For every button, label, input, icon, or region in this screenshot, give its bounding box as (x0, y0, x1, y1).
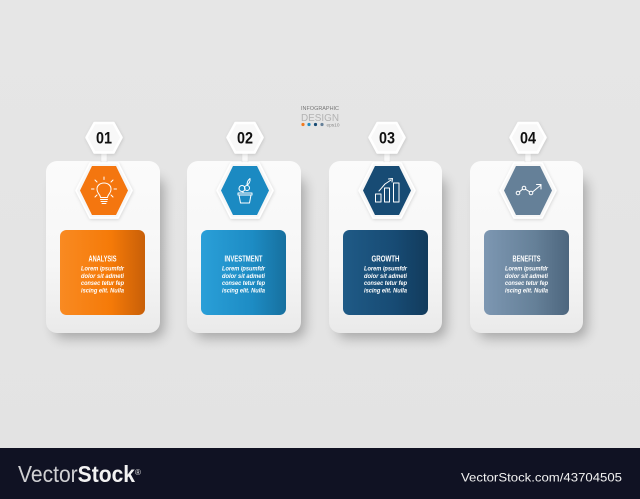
content box 4: dolor sit admeti (505, 273, 548, 280)
icon hexagon: potted plant (217, 163, 273, 218)
content box 1 (60, 230, 145, 315)
header logo: eps10 (326, 122, 340, 128)
card 3 shadow and base (329, 161, 446, 338)
content box 1: ANALYSIS (88, 254, 117, 264)
footer bar (0, 448, 640, 499)
panel: step 2 investment (187, 123, 305, 338)
content box 2: Lorem ipsumfdr (222, 266, 265, 272)
content box 1: iscing elit. Nulla (81, 287, 124, 294)
content box 4 (484, 230, 569, 315)
panel: step 1 analysis (46, 123, 164, 338)
content box 2: consec tetur fep (222, 280, 265, 287)
icon hexagon: growth bars (359, 163, 415, 218)
content box 2: INVESTMENT (224, 254, 262, 264)
panel: step 3 growth (329, 123, 446, 338)
card 2 shadow and base (187, 161, 305, 338)
content box 3: consec tetur fep (364, 280, 407, 287)
footer logo: VectorStock (18, 461, 135, 487)
number badge 01 (86, 123, 122, 166)
footer url: VectorStock.com/43704505 (461, 470, 622, 484)
content box 2 (201, 230, 286, 315)
number badge 04: 04 (520, 128, 536, 147)
number badge 03 (370, 123, 404, 166)
content box 3 (343, 230, 428, 315)
content box 4: BENEFITS (512, 254, 541, 264)
content box 1: consec tetur fep (81, 280, 124, 287)
content box 3: iscing elit. Nulla (364, 287, 407, 294)
content box 4: consec tetur fep (505, 280, 548, 287)
content box 3: Lorem ipsumfdr (364, 266, 407, 272)
registered mark: ® (135, 468, 141, 477)
icon hexagon: light bulb (76, 163, 132, 218)
content box 1: dolor sit admeti (81, 273, 124, 280)
number badge 02 (228, 123, 262, 166)
content box 4: iscing elit. Nulla (505, 287, 548, 294)
content box 2: iscing elit. Nulla (222, 287, 265, 294)
header logo: DESIGN (301, 112, 339, 124)
content box 2: dolor sit admeti (222, 273, 265, 280)
number badge 01: 01 (96, 128, 112, 147)
card 4 shadow and base (470, 161, 587, 338)
header logo: INFOGRAPHIC (301, 106, 339, 112)
number badge 04 (510, 123, 546, 166)
number badge 03: 03 (379, 128, 395, 147)
panel: step 4 benefits (470, 123, 587, 338)
header logo (301, 106, 340, 128)
card 1 shadow and base (46, 161, 164, 338)
content box 1: Lorem ipsumfdr (81, 266, 124, 272)
content box 4: Lorem ipsumfdr (505, 266, 548, 272)
content box 3: dolor sit admeti (364, 273, 407, 280)
content box 3: GROWTH (372, 254, 400, 264)
icon hexagon: trend line (500, 163, 556, 218)
number badge 02: 02 (237, 128, 253, 147)
